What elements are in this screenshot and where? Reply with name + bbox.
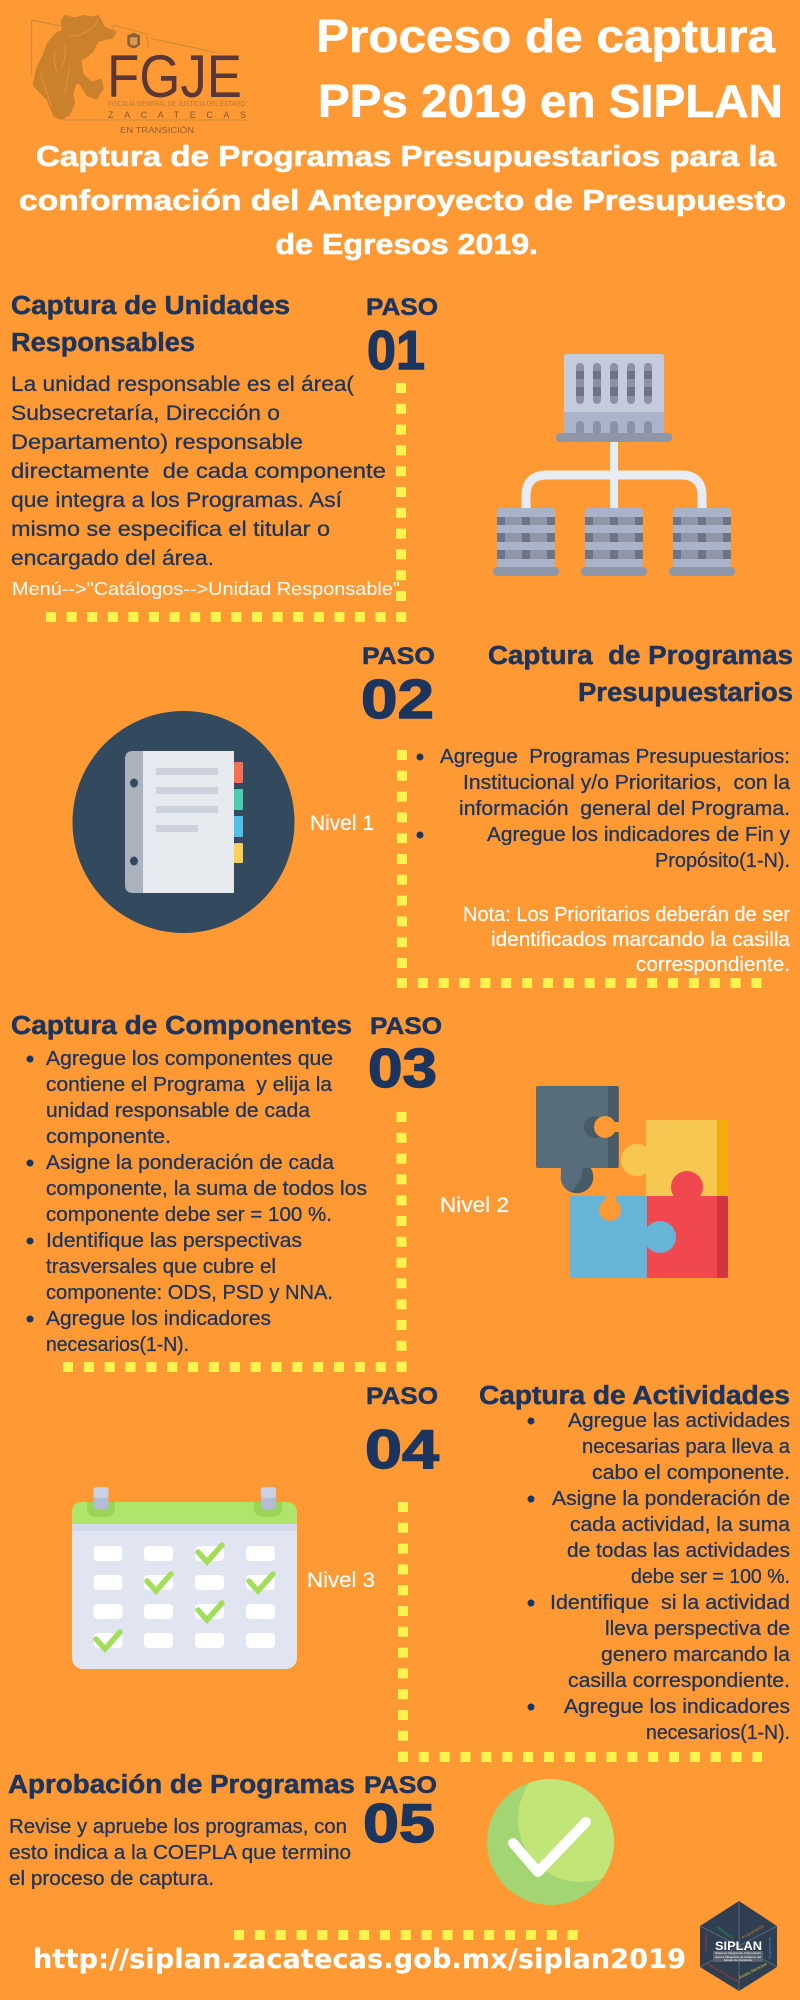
bullet list: paso 3: componente. (46, 1125, 171, 1148)
bullet list: paso 4: cada actividad, la suma (570, 1513, 791, 1536)
text block: paso 1 (11, 372, 386, 570)
step number 03 (368, 1013, 442, 1099)
heading: paso 1 (11, 292, 290, 357)
text block: paso 5: Revise y apruebe los programas, con (9, 1815, 347, 1838)
text block: paso 5: el proceso de captura. (9, 1867, 214, 1890)
bullet list: paso 4: necesarios(1-N). (646, 1721, 790, 1744)
text block: paso 1: directamente de cada componente (11, 459, 386, 483)
bullet list: paso 4: de todas las actividades (567, 1539, 790, 1562)
bullet list: paso 3: necesarios(1-N). (46, 1333, 189, 1356)
text block: paso 1: mismo se especifica el titular o (11, 517, 330, 541)
step number 02: PASO (362, 643, 435, 670)
text block: paso 1: La unidad responsable es el área( (11, 372, 355, 396)
menu path note: Menú-->"Catálogos-->Unidad Responsable" (12, 578, 400, 599)
bullet list: paso 2: Agregue los indicadores de Fin y (487, 823, 791, 846)
heading: paso 2: Captura de Programas (488, 642, 793, 670)
bullet list: paso 3: unidad responsable de cada (46, 1099, 311, 1122)
logo: SIPLAN (700, 1901, 777, 1991)
logo: FGJE: EN TRANSICIÓN (120, 126, 194, 135)
label: nivel 2: Nivel 2 (440, 1193, 509, 1217)
logo: SIPLAN: Sistema Integral de Información (715, 1951, 761, 1955)
panel: paso 2 (72, 642, 793, 983)
step number 01: 01 (367, 319, 425, 381)
logo: FGJE (32, 15, 247, 135)
bullet list: paso 2: Agregue Programas Presupuestarios: (440, 745, 790, 768)
icon: check circle (487, 1779, 614, 1905)
logo: SIPLAN: Programación (741, 1923, 765, 1940)
step number 03: 03 (368, 1037, 437, 1099)
bullet list: paso 3: componente: ODS, PSD y NNA. (46, 1281, 333, 1304)
step number 04: 04 (365, 1418, 439, 1480)
subtitle (19, 141, 786, 261)
step number 04: PASO (366, 1383, 438, 1410)
panel: paso 5 (8, 1774, 614, 1905)
bullet list: paso 3: Identifique las perspectivas (46, 1229, 302, 1252)
panel: paso 1 (11, 292, 735, 617)
text block: paso 1: encargado del área. (11, 546, 214, 570)
title: PPs 2019 en SIPLAN (318, 75, 783, 127)
bullet list: paso 3: trasversales que cubre el (46, 1255, 276, 1278)
heading: paso 1: Responsables (11, 329, 195, 357)
note: prioritarios: identificados marcando la casilla (491, 928, 791, 951)
panel: paso 4 (72, 1382, 791, 1757)
step number 02: 02 (361, 668, 434, 730)
bullet list: paso 3: contiene el Programa y elija la (46, 1073, 333, 1096)
bullet list: paso 2: Propósito(1-N). (655, 849, 790, 872)
step number 01 (366, 294, 438, 381)
icon: puzzle (536, 1086, 728, 1278)
heading: paso 3: Captura de Componentes (11, 1012, 352, 1040)
bullet list: paso 4: genero marcando la (601, 1643, 791, 1666)
text block: paso 1: que integra a los Programas. Así (11, 488, 342, 512)
label: nivel 3: Nivel 3 (307, 1568, 375, 1592)
bullet list: paso 3: Asigne la ponderación de cada (46, 1151, 335, 1174)
logo: FGJE: FGJE (107, 43, 242, 110)
logo: FGJE: FISCALÍA GENERAL DE JUSTICIA DEL ESTADO (108, 99, 245, 108)
bullet list: paso 2: información general del Programa. (459, 797, 790, 820)
subtitle: conformación del Anteproyecto de Presupuesto (19, 185, 786, 217)
heading: paso 2: Presupuestarios (578, 679, 793, 707)
step number 05 (363, 1772, 437, 1854)
note: prioritarios: Nota: Los Prioritarios deberán de ser (463, 903, 790, 926)
bullet list: paso 4: casilla correspondiente. (568, 1669, 790, 1692)
note: prioritarios (463, 903, 791, 976)
text block: paso 5 (9, 1815, 351, 1890)
title (316, 10, 783, 127)
bullet list: paso 4: Agregue las actividades (568, 1409, 790, 1432)
bullet list: paso 3: Agregue los indicadores (46, 1307, 271, 1330)
bullet list: paso 3: componente, la suma de todos los (46, 1177, 367, 1200)
logo: SIPLAN: Planeación (716, 1925, 735, 1940)
bullet list: paso 4: necesarias para lleva a (582, 1435, 791, 1458)
bullet list: paso 4: Agregue los indicadores (564, 1695, 790, 1718)
note: prioritarios: correspondiente. (636, 953, 790, 976)
bullet list: paso 4: Asigne la ponderación de (552, 1487, 790, 1510)
bullet list: paso 4: debe ser = 100 %. (631, 1565, 790, 1588)
bullet list: paso 2: Institucional y/o Prioritarios, con la (463, 771, 791, 794)
logo: SIPLAN: Seguimiento (767, 1936, 772, 1959)
bullet list: paso 2 (416, 745, 791, 872)
icon: notebook (72, 711, 294, 933)
step number 01: PASO (366, 294, 438, 321)
panel: paso 3 (11, 1012, 728, 1367)
logo: SIPLAN: para la Planeación de Gobierno del (715, 1955, 761, 1959)
text block: paso 1: Subsecretaría, Dirección o (11, 401, 280, 425)
heading: paso 4: Captura de Actividades (479, 1382, 790, 1410)
step number 05: PASO (364, 1772, 437, 1799)
icon: calendar (72, 1487, 297, 1669)
bullet list: paso 3 (26, 1047, 367, 1356)
logo: SIPLAN: Oficina de Ejecución (706, 1961, 740, 1984)
step number 04 (365, 1383, 439, 1480)
text block: paso 1: Departamento) responsable (11, 430, 303, 454)
bullet list: paso 4: cabo el componente. (592, 1461, 790, 1484)
link: siplan url: http://siplan.zacatecas.gob.mx/siplan2019 (33, 1944, 686, 1975)
logo: SIPLAN: Evaluación (704, 1933, 709, 1953)
bullet list: paso 4 (528, 1409, 791, 1744)
step number 05: 05 (363, 1792, 435, 1854)
logo: SIPLAN: SIPLAN (715, 1939, 762, 1953)
label: nivel 1: Nivel 1 (310, 811, 374, 835)
step number 02 (361, 643, 435, 730)
heading: paso 2 (488, 642, 793, 707)
step number 03: PASO (370, 1013, 442, 1040)
logo: SIPLAN: Ámbito Municipal (738, 1961, 767, 1980)
title: Proceso de captura (316, 10, 775, 62)
icon: server hierarchy (493, 354, 735, 576)
logo: SIPLAN: Estado de Zacatecas (724, 1958, 752, 1962)
logo: FGJE: ZACATECAS (108, 110, 246, 120)
bullet list: paso 4: Identifique si la actividad (550, 1591, 790, 1614)
heading: paso 5: Aprobación de Programas (8, 1771, 355, 1799)
bullet list: paso 3: Agregue los componentes que (46, 1047, 333, 1070)
bullet list: paso 3: componente debe ser = 100 %. (46, 1203, 332, 1226)
heading: paso 1: Captura de Unidades (11, 292, 290, 320)
subtitle: de Egresos 2019. (276, 229, 538, 261)
bullet list: paso 4: lleva perspectiva de (605, 1617, 790, 1640)
subtitle: Captura de Programas Presupuestarios para la (36, 141, 777, 173)
text block: paso 5: esto indica a la COEPLA que termino (9, 1841, 351, 1864)
